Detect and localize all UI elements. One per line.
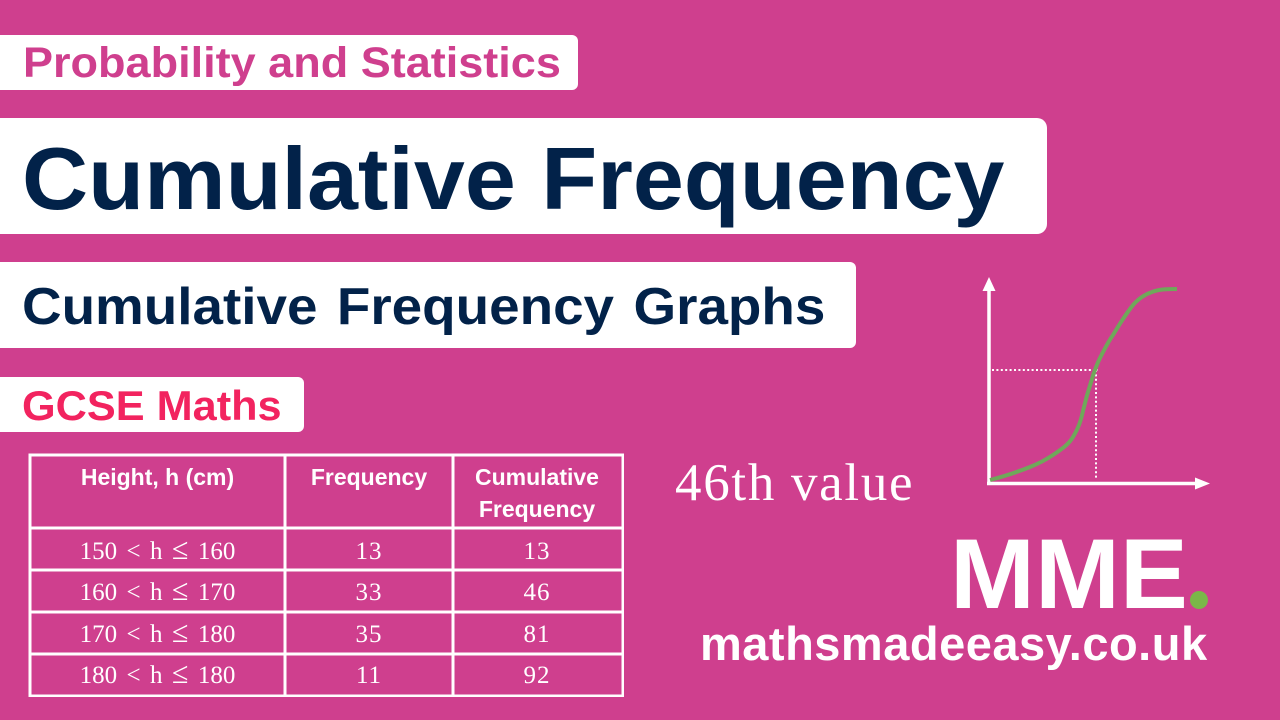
table row 1: 13 [524, 538, 550, 565]
table row 3: 81 [524, 621, 550, 648]
y axis arrow [982, 277, 996, 485]
table: cumulative frequency data [28, 454, 624, 697]
table row 4: 180 < h ≤ 180 [80, 657, 235, 690]
table row 1: 13 [356, 538, 382, 565]
banner: Cumulative Frequency Graphs [0, 262, 856, 348]
table header: Frequency: Frequency [311, 464, 427, 490]
table row 3: 35 [356, 621, 382, 648]
table row 2: 33 [356, 579, 382, 606]
table row 1 [80, 533, 550, 566]
x axis arrow [987, 478, 1210, 490]
banner: Cumulative Frequency title: Cumulative Frequency [22, 129, 1005, 228]
table row 2 [80, 574, 550, 607]
banner: Cumulative Frequency Graphs: Cumulative Frequency Graphs [22, 278, 825, 336]
table header: Cumulative Frequency [475, 464, 599, 522]
table row 2: 46 [524, 579, 550, 606]
label: 46th value: 46th value [675, 454, 914, 512]
website address: mathsmadeeasy.co.uk [700, 617, 1208, 670]
logo: MME: MME [950, 518, 1188, 629]
green curve [990, 289, 1177, 480]
table row 3 [80, 616, 550, 649]
banner: Probability and Statistics: Probability and Statistics [23, 39, 561, 87]
table row 1: 150 < h ≤ 160 [80, 533, 235, 566]
table header: Height: Height, h (cm) [81, 464, 234, 490]
dotted guide lines [992, 370, 1098, 480]
table row 4: 11 [356, 662, 382, 689]
table row 4 [80, 657, 550, 690]
table header: Cumulative Frequency: Cumulative [475, 464, 599, 490]
table row 2: 160 < h ≤ 170 [80, 574, 235, 607]
table row 4: 92 [524, 662, 550, 689]
logo: green dot [1190, 591, 1208, 609]
banner: GCSE Maths: GCSE Maths [22, 382, 282, 429]
table row 3: 170 < h ≤ 180 [80, 616, 235, 649]
chart: cumulative frequency curve [982, 277, 1210, 490]
table header: Cumulative Frequency: Frequency [479, 496, 595, 522]
